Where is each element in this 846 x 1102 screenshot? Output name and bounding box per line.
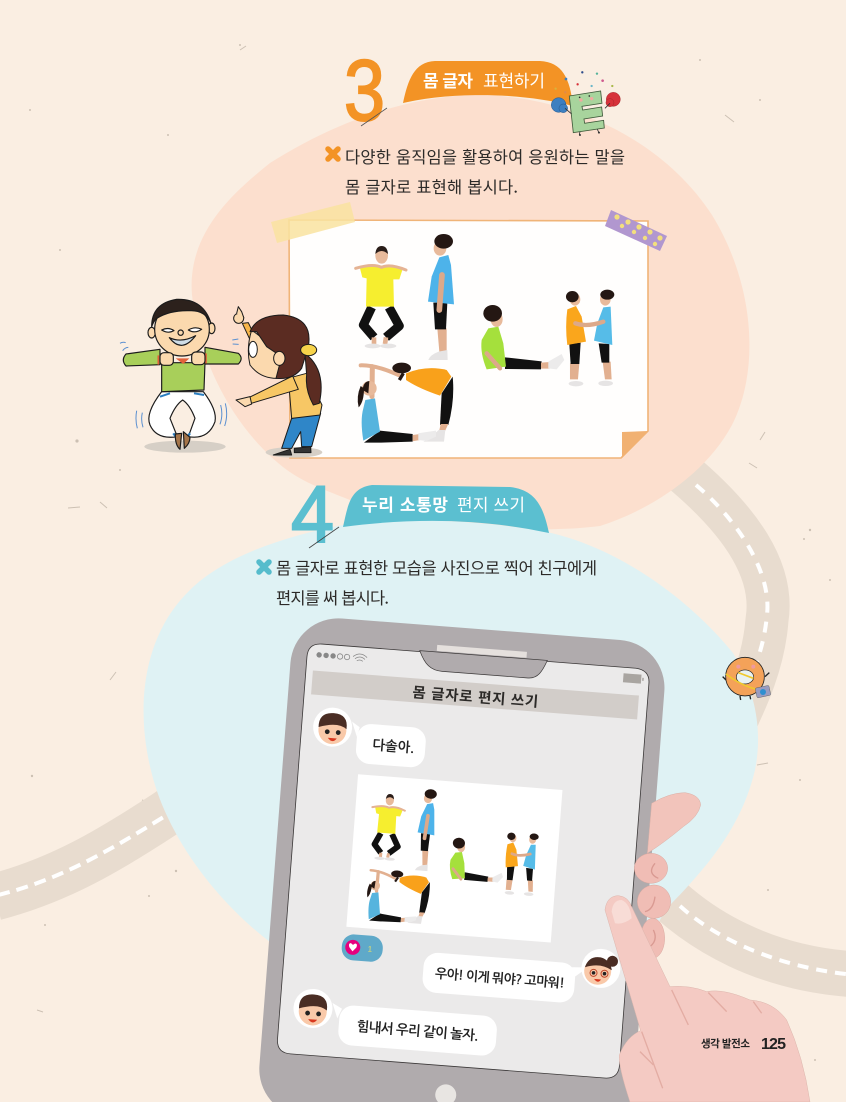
heading text 3: 몸 글자: [423, 72, 473, 91]
panel: phone: [256, 615, 668, 1102]
paper fold: [622, 431, 648, 458]
index finger and palm: [605, 896, 810, 1102]
road: upper right: [680, 470, 768, 750]
paper sheet: [289, 220, 648, 458]
bubble: thanks: [422, 952, 588, 1004]
number 4: 4: [291, 470, 334, 560]
cartoon boy: [123, 299, 241, 453]
instruction line 1: 다양한 움직임을 활용하여 응원하는 말을: [345, 144, 625, 168]
bubble: thanks: 우아! 이게 뭐야? 고마워!: [435, 967, 565, 990]
phone screen: [276, 643, 650, 1079]
status icons: [316, 651, 367, 662]
bubble: let's play: [329, 1003, 498, 1057]
bubble: greeting: [349, 722, 427, 768]
person: green shirt seated: [481, 305, 564, 369]
title bar: [311, 670, 639, 719]
panel: peach blob: [192, 95, 749, 529]
instruction line 4: 편지를 써 봅시다.: [276, 585, 389, 609]
bullet: teal cross: [259, 562, 269, 572]
phone speaker: [437, 645, 527, 658]
curled fingertips: [634, 853, 671, 958]
motion lines: [120, 339, 239, 428]
avatar: boy two: [292, 988, 334, 1029]
person: yellow shirt: [356, 246, 406, 348]
person: orange shirt bending: [361, 363, 453, 442]
icon: letter E cheerleader: [551, 71, 620, 136]
footer: page number: 125: [761, 1036, 786, 1053]
upper finger: [647, 793, 701, 853]
heading tab: orange: [403, 61, 573, 106]
section 3 heading: [344, 43, 573, 139]
illustration: hand: [605, 793, 810, 1102]
heading tab: teal: [343, 485, 549, 533]
panel: photo paper: [271, 202, 667, 458]
avatar: boy: [312, 706, 354, 748]
photo: children forming letters: [356, 234, 614, 443]
instruction text 4: [259, 555, 597, 609]
person: blue shirt standing: [428, 234, 454, 360]
tape: yellow: [271, 202, 355, 243]
footer: section label: 생각 발전소: [701, 1036, 750, 1051]
road: lower right: [650, 880, 846, 974]
phone body: [256, 615, 668, 1102]
panel: blue blob: [144, 520, 758, 1000]
instruction line 2: 몸 글자로 표현해 봅시다.: [345, 174, 518, 198]
tape: purple dots: [605, 210, 667, 251]
instruction text 3: [328, 144, 625, 198]
number 3: 3: [344, 43, 385, 139]
illustration: boy and girl cartoon: [120, 299, 322, 458]
phone notch: [418, 651, 547, 679]
bullet: orange cross: [328, 149, 338, 159]
home button: [434, 1084, 457, 1102]
road: lower left: [0, 780, 215, 897]
person: blue shirt seated girl: [358, 367, 436, 443]
road dashes: [0, 485, 846, 974]
like badge: [341, 934, 384, 963]
person: orange shirt facing: [566, 291, 586, 386]
bubble: greeting: 다솔아.: [372, 737, 415, 755]
bubble: let's play: 힘내서 우리 같이 놀자.: [356, 1019, 479, 1043]
heading text 4 second part: 편지 쓰기: [457, 496, 525, 515]
battery: [623, 673, 644, 684]
instruction line 3: 몸 글자로 표현한 모습을 사진으로 찍어 친구에게: [276, 555, 597, 579]
fingernail: [612, 900, 632, 924]
heading text 4: 누리 소통망: [362, 496, 448, 515]
cartoon girl: [234, 307, 322, 458]
icon: donut with camera: [723, 657, 771, 700]
person: blue shirt facing: [575, 290, 614, 386]
section 4 heading: [291, 470, 549, 560]
like badge: 1: [367, 944, 373, 954]
title bar text: 몸 글자로 편지 쓰기: [412, 681, 539, 712]
heading text 3 second part: 표현하기: [483, 72, 545, 91]
avatar: girl: [580, 947, 622, 989]
shared photo: [346, 774, 562, 943]
